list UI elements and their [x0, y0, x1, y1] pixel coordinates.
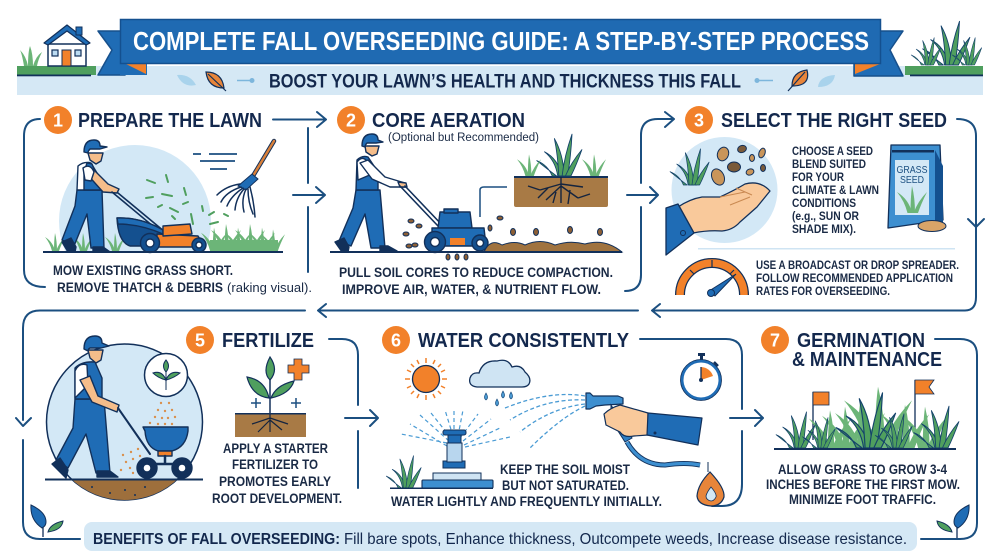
illustration: light blue backdrop	[59, 145, 211, 251]
step 3 number badge	[685, 106, 713, 134]
step 7 heading: GERMINATION	[797, 330, 925, 352]
step 7 heading: & MAINTENANCE	[792, 349, 942, 371]
step 5 text	[212, 441, 342, 506]
icon: sprout right	[937, 505, 969, 538]
step 3 number badge: 3	[694, 110, 704, 130]
step 2 text: IMPROVE AIR, WATER, & NUTRIENT FLOW.	[342, 282, 601, 297]
step 3 spreader text	[756, 258, 959, 298]
step 3 seed text: CHOOSE A SEED	[792, 144, 873, 158]
step 2 text: PULL SOIL CORES TO REDUCE COMPACTION.	[339, 265, 613, 280]
illustration: soil block with grass and roots	[514, 134, 608, 207]
step 7 number badge	[761, 326, 789, 354]
illustration: person mowing	[62, 140, 119, 252]
illustration: flags and grass	[774, 380, 959, 450]
step 3 seed text: CLIMATE & LAWN	[792, 183, 879, 197]
illustration: seed in hand	[666, 137, 778, 255]
panel: step 1 prepare the lawn	[43, 106, 312, 297]
step 1 number badge	[44, 106, 72, 134]
icon: hose spray	[505, 393, 702, 465]
icons: subtitle leaves left	[177, 72, 254, 91]
step 3 seed text: (e.g., SUN OR	[792, 209, 859, 223]
step 3 seed text: BLEND SUITED	[792, 157, 866, 171]
icon: rake	[217, 141, 274, 217]
icon: grass tuft top right	[905, 21, 983, 76]
soil plugs	[403, 216, 602, 260]
step 5 text: FERTILIZER TO	[232, 457, 318, 472]
icon: grass seed bag: GRASS	[896, 165, 928, 176]
icon: grass at mower	[45, 224, 285, 251]
panel: step 6 water consistently	[382, 326, 724, 509]
flow arrows and brackets	[16, 112, 984, 539]
step 6 number badge: 6	[391, 330, 401, 350]
illustration: lawn mower	[112, 192, 206, 252]
benefits heading: BENEFITS OF FALL OVERSEEDING:	[93, 531, 340, 548]
icon: grass seed bag: SEED	[900, 175, 924, 186]
icon: rain cloud	[470, 360, 530, 406]
step 1 text: REMOVE THATCH & DEBRIS	[57, 280, 223, 295]
step 3 seed text	[792, 144, 879, 236]
step 3 seed text: SHADE MIX).	[792, 222, 856, 236]
benefits text: Fill bare spots, Enhance thickness, Outcompete weeds, Increase disease resistance.	[344, 531, 907, 548]
step 2 text	[339, 265, 613, 297]
step 2 number badge	[337, 106, 365, 134]
illustration: person with spreader in circle	[45, 335, 204, 501]
step 6 text: WATER LIGHTLY AND FREQUENTLY INITIALLY.	[391, 494, 662, 509]
icon: stopwatch	[680, 353, 722, 400]
title: COMPLETE FALL OVERSEEDING GUIDE: A STEP-BY-STEP PROCESS	[133, 28, 869, 56]
step 7 number badge: 7	[770, 330, 780, 350]
step 3 spreader text: FOLLOW RECOMMENDED APPLICATION	[756, 271, 953, 285]
icon: water drop	[697, 462, 724, 506]
step 2 heading: CORE AERATION	[372, 110, 525, 132]
divider	[698, 248, 955, 250]
icon: sprout left	[31, 505, 63, 537]
icon: sprinkler	[386, 408, 510, 489]
step 2 number badge: 2	[346, 110, 356, 130]
step 7 text: INCHES BEFORE THE FIRST MOW.	[766, 477, 960, 492]
step 3 seed text: FOR YOUR	[792, 170, 844, 184]
step 5 number badge	[186, 326, 214, 354]
subtitle: BOOST YOUR LAWN’S HEALTH AND THICKNESS THIS FALL	[269, 72, 741, 92]
step 6 text: KEEP THE SOIL MOIST	[500, 462, 631, 477]
step 6 text: BUT NOT SATURATED.	[502, 478, 629, 493]
panel: step 7 germination and maintenance	[761, 326, 960, 507]
header subtitle band	[17, 66, 983, 95]
step 1 text: MOW EXISTING GRASS SHORT.	[53, 263, 233, 278]
step 1 number badge: 1	[53, 110, 63, 130]
step 5 text: APPLY A STARTER	[223, 441, 328, 456]
step 3 heading: SELECT THE RIGHT SEED	[721, 110, 947, 132]
step 7 text: ALLOW GRASS TO GROW 3-4	[778, 462, 947, 477]
step 5 heading: FERTILIZE	[222, 330, 314, 352]
icon: sun	[405, 358, 447, 400]
callout line	[480, 187, 507, 217]
panel: step 2 core aeration	[330, 106, 622, 297]
motion lines	[193, 154, 237, 169]
illustration: grass clippings	[146, 175, 228, 224]
step 5 text: ROOT DEVELOPMENT.	[212, 491, 342, 506]
step 7 heading	[792, 330, 942, 371]
panel: step 5 fertilize	[40, 326, 342, 510]
panel: step 3 select the right seed	[666, 106, 959, 298]
step 6 heading: WATER CONSISTENTLY	[418, 330, 630, 352]
step 5 number badge: 5	[195, 330, 205, 350]
icon: grass seed bag	[888, 145, 946, 232]
icon: fertilized seedling	[235, 357, 309, 437]
step 7 text: MINIMIZE FOOT TRAFFIC.	[789, 492, 936, 507]
step 6 number badge	[382, 326, 410, 354]
title banner	[98, 20, 903, 76]
illustration: person aerating	[335, 134, 407, 252]
soil mound	[484, 242, 622, 252]
icons: subtitle leaves right	[754, 70, 835, 91]
step 1 text	[53, 263, 312, 295]
benefits bar	[84, 522, 917, 551]
step 2 subheading: (Optional but Recommended)	[388, 132, 539, 144]
step 5 text: PROMOTES EARLY	[219, 474, 331, 489]
step 3 spreader text: USE A BROADCAST OR DROP SPREADER.	[756, 258, 959, 272]
step 3 spreader text: RATES FOR OVERSEEDING.	[756, 284, 890, 298]
illustration: aerator machine	[400, 186, 488, 252]
step 6 text	[391, 462, 662, 509]
step 1 text: (raking visual).	[227, 280, 312, 295]
step 7 text	[766, 462, 960, 507]
step 1 heading: PREPARE THE LAWN	[78, 110, 262, 132]
icon: house	[17, 25, 96, 76]
step 3 seed text: CONDITIONS	[792, 196, 856, 210]
icon: application rate gauge	[680, 260, 744, 296]
